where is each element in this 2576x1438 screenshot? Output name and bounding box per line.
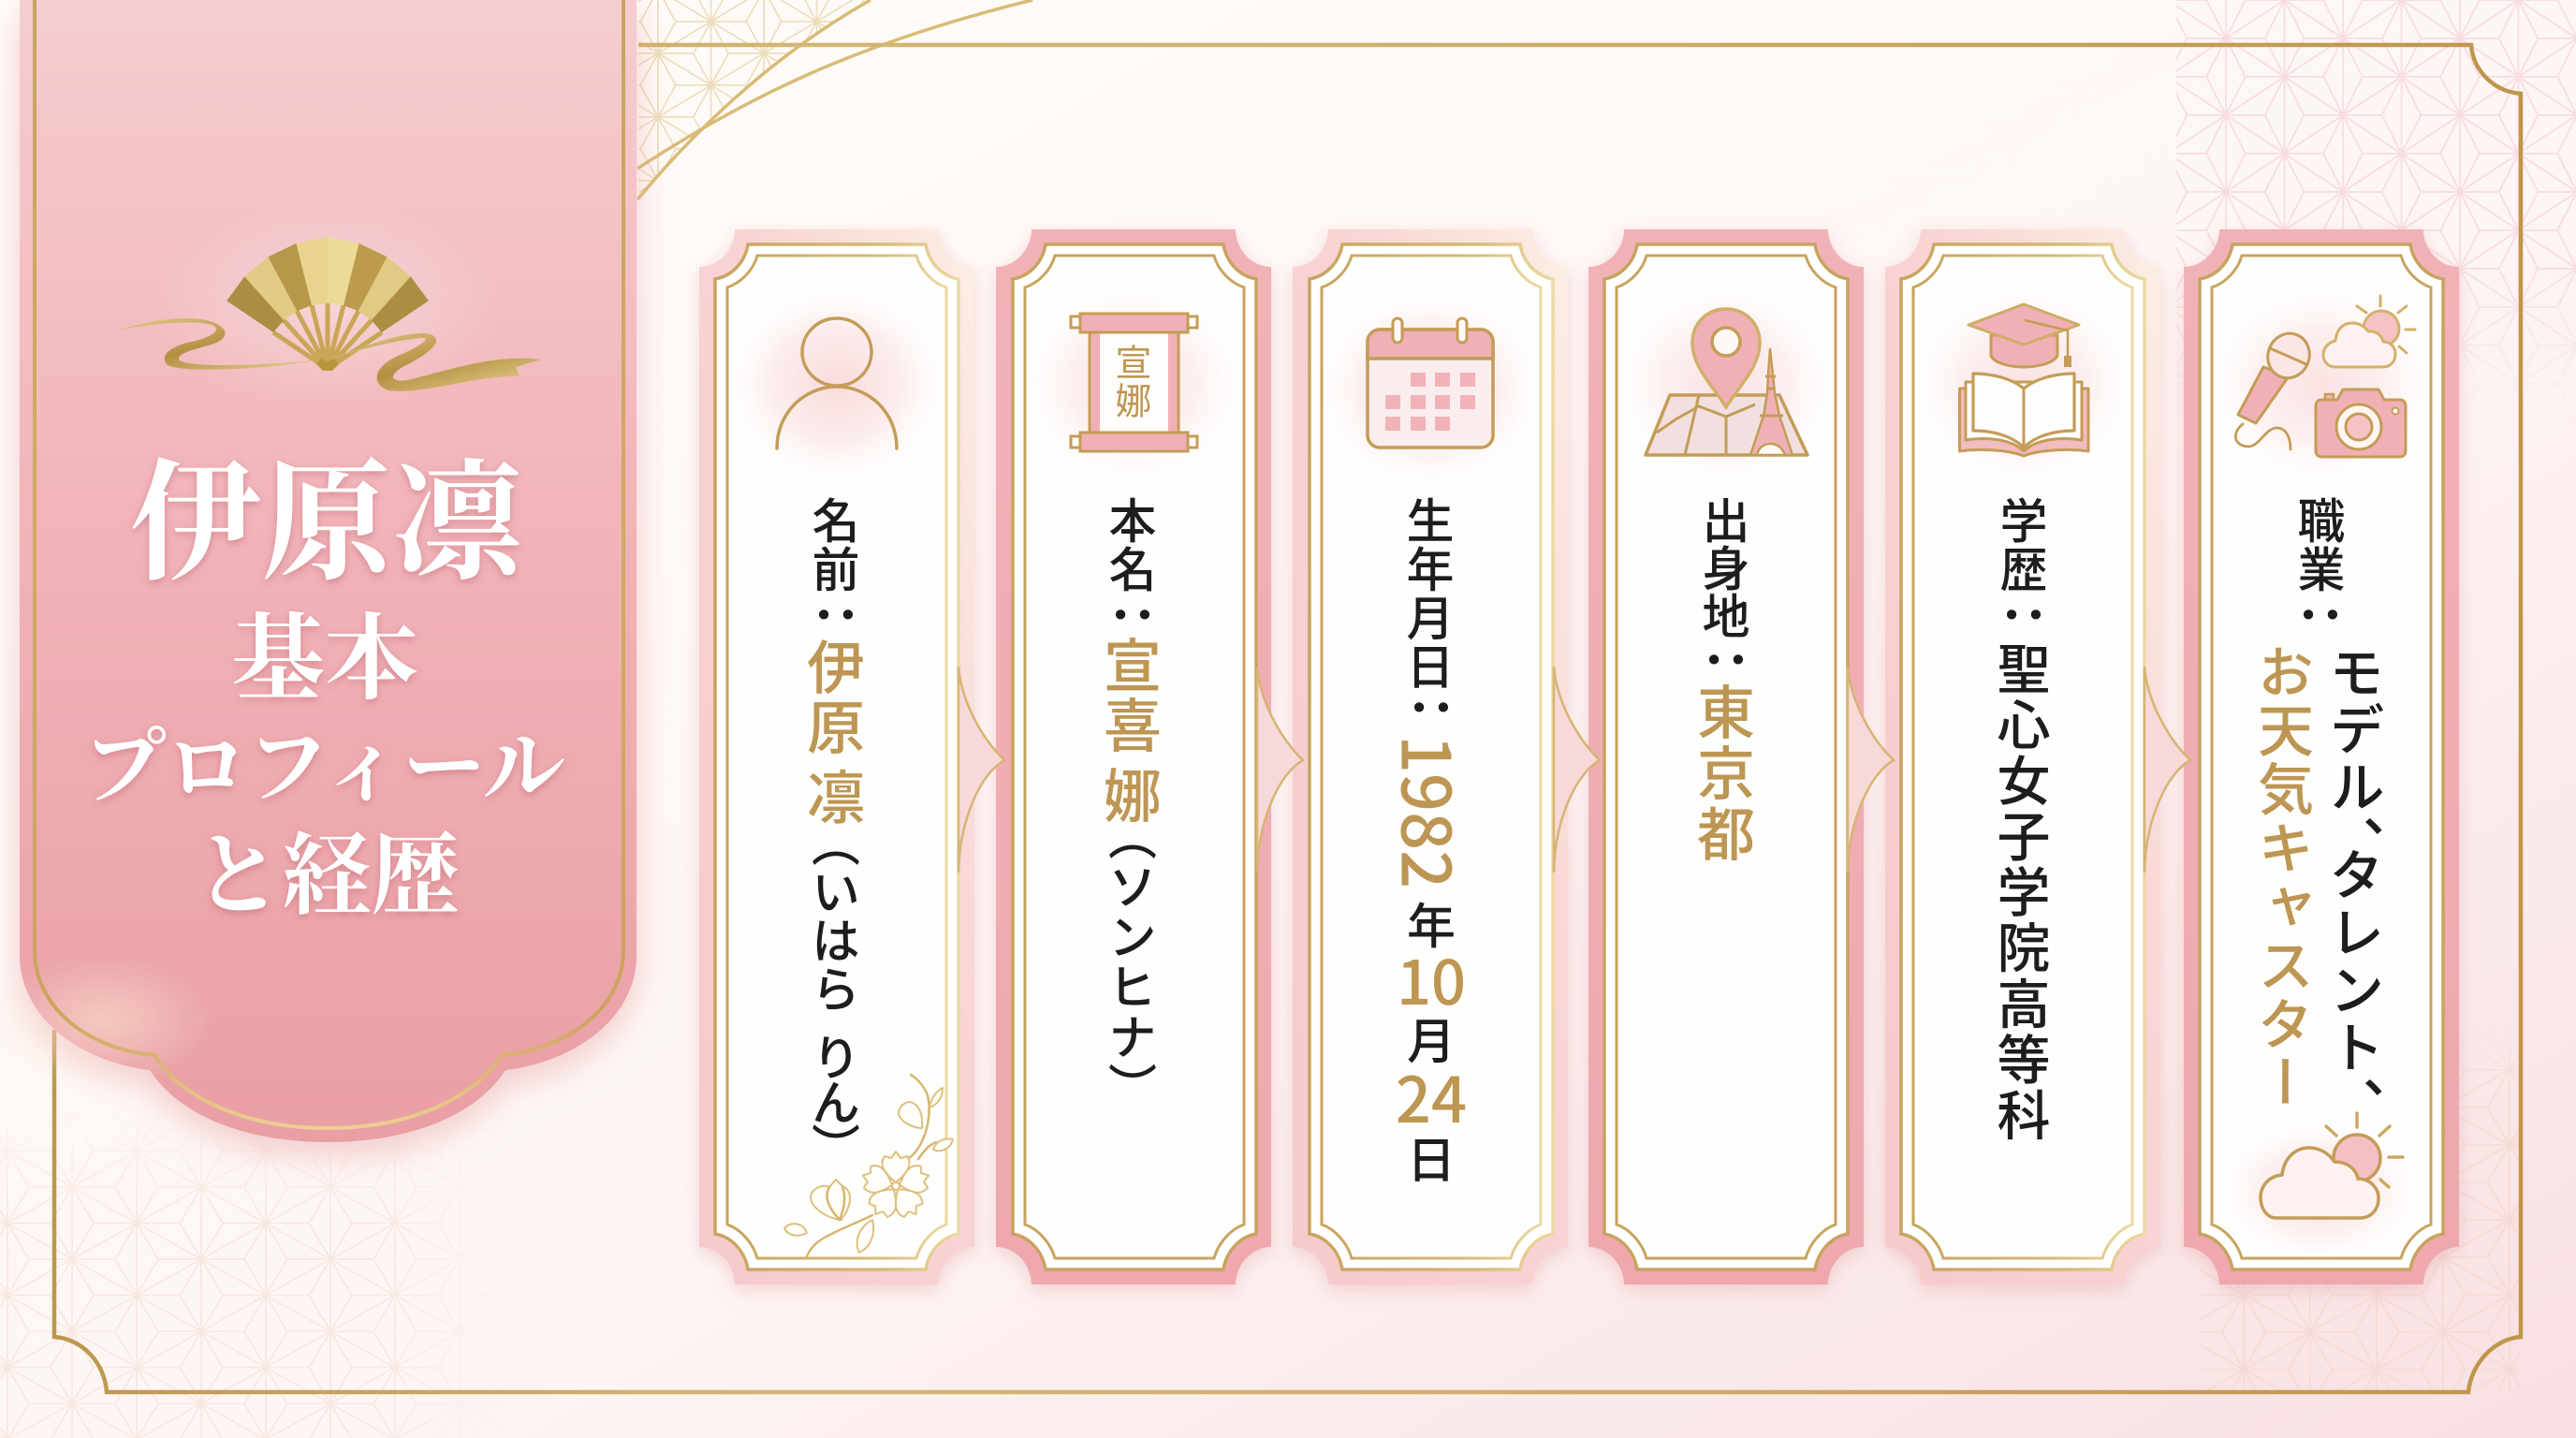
reading: （いはら	[801, 818, 871, 1013]
unit: month: 月	[1397, 1016, 1466, 1064]
value: occupation black 1: モデル、	[2318, 644, 2396, 873]
background pattern: top left gold asanoha	[638, 0, 871, 201]
value: school: 聖心女子学院高等科	[1985, 641, 2062, 1143]
value: month: 10	[1397, 934, 1466, 1022]
reading: （ソンヒナ）	[1097, 812, 1168, 1112]
colon: ：	[2284, 589, 2357, 639]
background pattern: bottom right asanoha	[2200, 1053, 2522, 1390]
icon glow	[1621, 290, 1831, 477]
panel: card 6 occupation	[2144, 229, 2459, 1284]
card frame	[2184, 229, 2459, 1284]
icon: folding fan with ribbons	[114, 201, 541, 407]
title: basic: 基本	[231, 583, 418, 718]
title: and career: と経歴	[193, 805, 461, 932]
colon: ：	[1395, 682, 1468, 732]
banner gold border	[35, 0, 623, 1128]
colon: ：	[1689, 634, 1764, 684]
icon: scroll	[1071, 314, 1197, 451]
colon: ：	[799, 589, 872, 639]
decorative gold arcs	[637, 0, 1032, 199]
value: name: 伊原	[794, 638, 878, 757]
icon: graduation cap and book	[1960, 304, 2088, 456]
value: day: 24	[1396, 1050, 1467, 1141]
unit: year: 年	[1397, 901, 1466, 949]
card frame	[1293, 229, 1568, 1284]
panel: title banner	[0, 0, 637, 1142]
title: profile: プロフィール	[83, 702, 565, 820]
card frame	[699, 229, 974, 1284]
card frame	[1588, 229, 1864, 1284]
value: Tokyo: 東京都	[1684, 682, 1768, 865]
label: 職業	[2287, 496, 2356, 594]
title: name: 伊原凛	[130, 418, 527, 607]
icon glow	[2214, 290, 2429, 477]
icon: glow behind cloud	[2221, 1123, 2418, 1258]
icon glow	[1029, 290, 1238, 477]
icon glow	[1323, 295, 1538, 482]
arrow: card 5 to 6	[2144, 667, 2190, 873]
banner shape	[20, 0, 637, 1142]
panel: card 4 birthplace	[1554, 229, 1864, 1284]
value: year: 1982	[1382, 735, 1481, 888]
arrow: card 2 to 3	[1257, 667, 1303, 873]
arrow: card 4 to 5	[1848, 667, 1894, 873]
panel: card 1 name	[699, 229, 974, 1284]
label: 生年月日	[1396, 496, 1465, 691]
background pattern: top right asanoha	[2176, 0, 2576, 369]
background pattern: bottom left asanoha	[0, 1153, 450, 1438]
icon: cloud and sun	[2261, 1113, 2403, 1218]
panel: card 2 real name	[959, 229, 1271, 1284]
unit: day: 日	[1397, 1135, 1466, 1183]
colon: ：	[1095, 589, 1170, 639]
icon glow	[1919, 290, 2129, 477]
panel: card 3 birthday	[1257, 229, 1568, 1284]
icon: calendar	[1368, 318, 1493, 448]
arrow: card 3 to 4	[1554, 667, 1600, 873]
reading second part: りん）	[801, 1033, 871, 1167]
icon: scroll: 宣娜	[1107, 344, 1160, 420]
banner corner highlight	[0, 955, 215, 1086]
colon: ：	[1986, 589, 2061, 639]
card frame	[1885, 229, 2160, 1284]
card frame	[996, 229, 1271, 1284]
icon: microphone, cloud and camera	[2235, 296, 2415, 457]
value: occupation black 2: タレント、	[2318, 846, 2396, 1135]
arrow: card 1 to 2	[959, 667, 1004, 873]
value: real name second part: 娜	[1090, 766, 1175, 824]
value: name second part: 凛	[794, 768, 878, 826]
value: real name: 宣喜	[1090, 636, 1175, 756]
icon: cherry blossom branch	[784, 1075, 953, 1256]
label: 出身地	[1691, 496, 1761, 639]
icon: map pin and tower	[1646, 309, 1808, 455]
icon glow	[732, 290, 942, 477]
label: 名前	[801, 496, 871, 594]
panel: card 5 education	[1848, 229, 2160, 1284]
label: 学歴	[1989, 496, 2058, 594]
value: weather caster: お天気キャスター	[2245, 643, 2327, 1113]
icon: person	[777, 318, 897, 448]
label: 本名	[1098, 496, 1167, 594]
